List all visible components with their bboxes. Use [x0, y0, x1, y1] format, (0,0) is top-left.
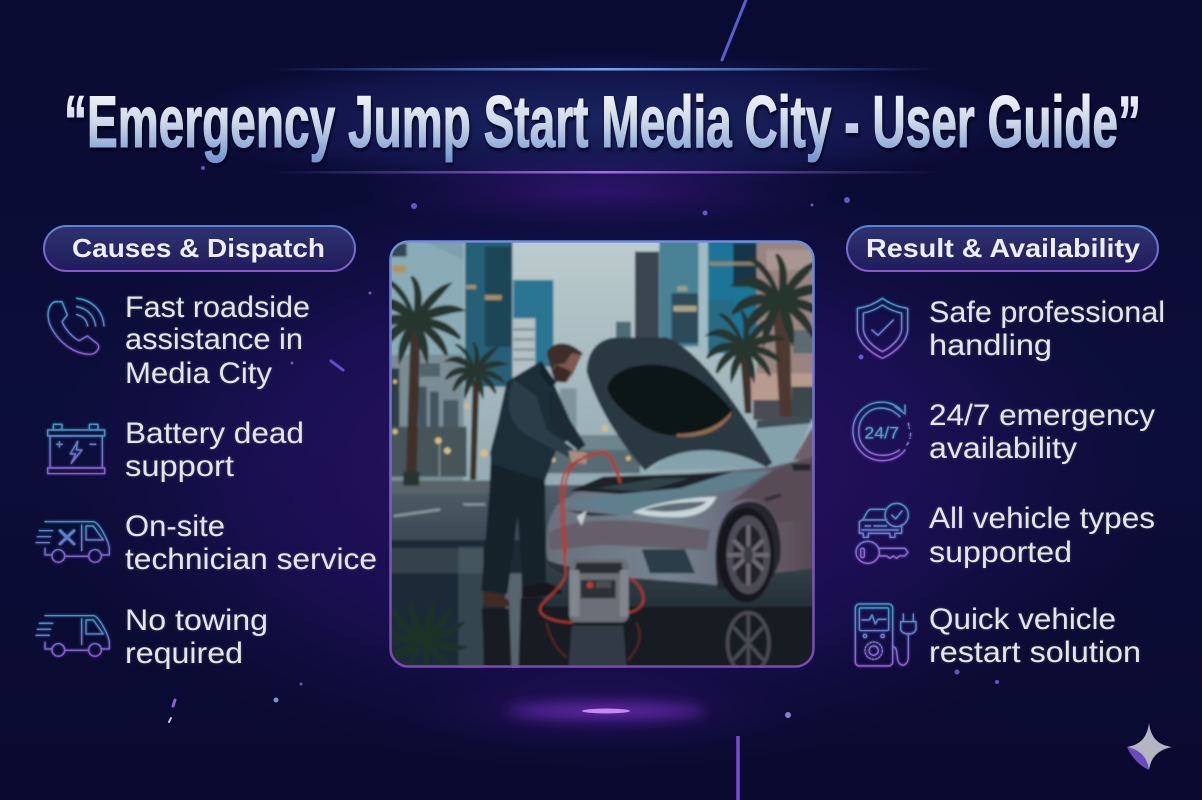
item: battery dead support: support	[125, 450, 235, 483]
item: quick vehicle restart solution	[929, 603, 1141, 669]
item: on-site technician service	[125, 510, 377, 576]
icon: phone	[48, 298, 104, 354]
item: quick vehicle restart solution: restart solution	[929, 636, 1141, 669]
photo frame	[390, 242, 814, 666]
heading pill: causes and dispatch	[44, 226, 355, 271]
wet road reflections	[383, 540, 815, 677]
photo: technician jump-starting a car in Media City	[370, 240, 829, 677]
item: no towing required: required	[125, 637, 243, 670]
item: battery dead support: Battery dead	[125, 417, 304, 450]
item: no towing required: No towing	[125, 604, 268, 637]
item: no towing required	[125, 604, 268, 670]
icon: delivery van	[36, 616, 109, 656]
item: battery dead support	[125, 417, 304, 483]
item: on-site technician service: On-site	[125, 510, 225, 543]
jump cables	[540, 452, 643, 660]
item: 24/7 emergency availability	[929, 399, 1155, 465]
item: on-site technician service: technician service	[125, 543, 377, 576]
technician	[481, 344, 587, 607]
item: 24/7 emergency availability: availability	[929, 432, 1077, 465]
car	[546, 417, 815, 602]
item: fast roadside assistance: assistance in	[125, 323, 303, 356]
wheel reflection	[728, 613, 769, 674]
item: quick vehicle restart solution: Quick vehicle	[929, 603, 1116, 636]
panel: causes and dispatch	[36, 226, 377, 670]
icon: 24/7 clock: 24/7	[864, 423, 899, 442]
item: fast roadside assistance: Media City	[125, 357, 272, 390]
item: safe professional handling: handling	[929, 329, 1052, 362]
icon: car and key	[856, 503, 908, 563]
icon: battery	[48, 424, 105, 474]
item: all vehicle types supported	[929, 502, 1155, 569]
item: safe professional handling	[929, 296, 1165, 362]
heading pill: result and availability	[847, 226, 1158, 271]
heading pill: causes and dispatch: Causes & Dispatch	[72, 233, 325, 263]
palm trees	[370, 254, 829, 486]
icon: on-site service van	[36, 522, 109, 562]
sky	[462, 242, 812, 487]
heading pill: result and availability: Result & Availability	[866, 233, 1141, 263]
icon: 24/7 clock	[853, 402, 911, 461]
raised hood	[587, 337, 772, 471]
panel: result and availability	[847, 226, 1165, 669]
road	[392, 484, 812, 608]
icon: sparkle mark	[1127, 723, 1172, 770]
item: all vehicle types supported: supported	[929, 536, 1072, 569]
icon: diagnostic device with plug	[855, 604, 916, 666]
item: all vehicle types supported: All vehicle types	[929, 502, 1155, 535]
item: 24/7 emergency availability: 24/7 emergency	[929, 399, 1155, 432]
icon: shield	[857, 298, 908, 358]
city buildings	[390, 240, 815, 482]
reflection of technician	[482, 598, 545, 670]
item: fast roadside assistance	[125, 291, 310, 390]
jump starter box	[568, 559, 629, 670]
item: fast roadside assistance: Fast roadside	[125, 291, 310, 324]
item: safe professional handling: Safe professional	[929, 296, 1165, 329]
street lights	[390, 380, 631, 487]
